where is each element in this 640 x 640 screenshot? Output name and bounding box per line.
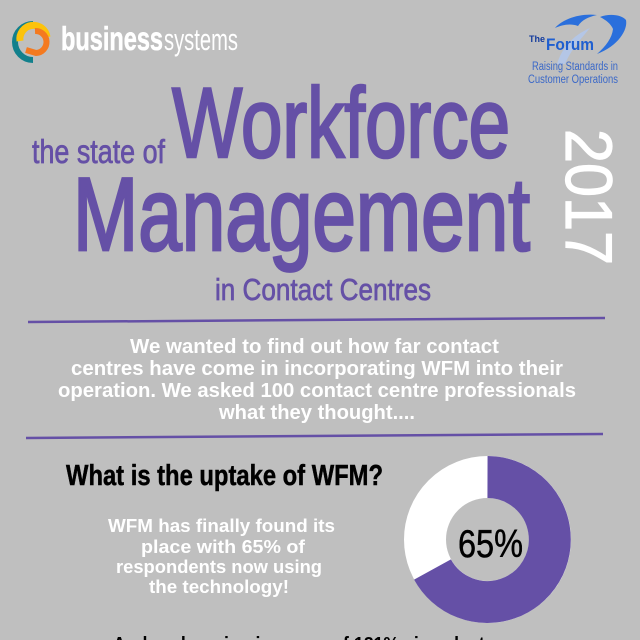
title: the state of: the state of xyxy=(32,133,166,170)
intro text: what they thought.... xyxy=(218,401,415,424)
The Forum wordmark: Forum xyxy=(546,35,594,54)
uptake description: the technology! xyxy=(149,576,289,597)
intro text: centres have come in incorporating WFM into their xyxy=(71,357,563,380)
intro text: operation. We asked 100 contact centre professionals xyxy=(58,379,576,402)
title: Workforce: Workforce xyxy=(172,67,510,178)
brand name: business systems: systems xyxy=(164,22,238,57)
uptake description: WFM has finally found its xyxy=(108,515,335,536)
brand name: business systems: business xyxy=(61,20,163,57)
year: 2017: 2017 xyxy=(552,129,626,265)
uptake description: respondents now using xyxy=(116,556,322,577)
intro text: We wanted to find out how far contact xyxy=(130,335,499,358)
uptake description: place with 65% of xyxy=(141,536,306,557)
Forum tagline: Raising Standards in xyxy=(532,61,618,73)
donut chart: 65% xyxy=(425,477,550,602)
icon: Forum swoosh xyxy=(555,15,626,64)
logo: The Forum xyxy=(528,15,626,86)
The Forum wordmark: The xyxy=(529,34,545,44)
Forum tagline: Customer Operations xyxy=(528,74,618,86)
donut value: 65% xyxy=(458,523,523,566)
heading: uptake of WFM: What is the uptake of WFM? xyxy=(66,460,383,492)
title xyxy=(32,67,530,307)
title: in Contact Centres: in Contact Centres xyxy=(215,272,431,307)
icon: business systems logo xyxy=(15,24,47,60)
